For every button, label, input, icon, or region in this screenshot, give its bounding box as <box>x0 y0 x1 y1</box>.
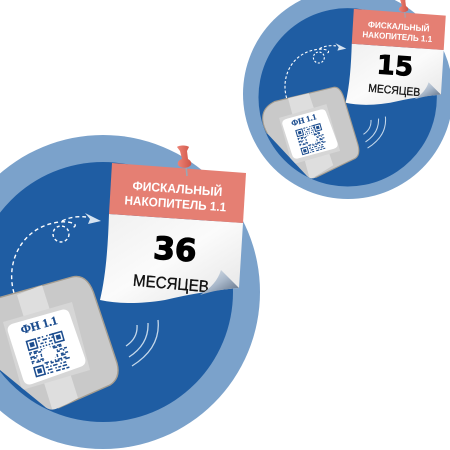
large outer ring <box>0 135 260 449</box>
small calendar card: МЕСЯЦЕВ <box>368 83 421 99</box>
small calendar card <box>346 9 446 105</box>
label text: ФН 1.1 <box>19 313 59 337</box>
small calendar card: НАКОПИТЕЛЬ 1.1 <box>362 29 433 44</box>
card title <box>124 177 228 214</box>
signal waves <box>126 320 158 366</box>
QR finder squares <box>26 331 72 377</box>
fiscal device <box>0 276 118 412</box>
small QR code <box>295 124 327 155</box>
months number: 36 <box>152 231 198 269</box>
small dashed flight path with arrow <box>285 43 346 98</box>
device strip <box>17 285 78 412</box>
dashed flight path with arrow <box>12 213 101 293</box>
small signal waves <box>363 117 386 148</box>
small badge: 15 months <box>258 0 446 186</box>
large badge: 36 months <box>0 135 260 449</box>
small calendar card: 15 <box>376 50 414 83</box>
small push pin <box>398 0 408 18</box>
months label: МЕСЯЦЕВ <box>132 272 210 296</box>
page curl <box>200 270 239 295</box>
calendar card <box>100 163 246 303</box>
small fiscal device <box>263 87 359 180</box>
QR code <box>26 331 72 377</box>
small calendar card: ФИСКАЛЬНЫЙ <box>368 18 430 34</box>
small device strip <box>288 93 333 180</box>
small label text: ФН 1.1 <box>290 112 317 128</box>
card paper <box>100 214 243 303</box>
card header <box>109 163 246 223</box>
small outer ring <box>243 0 450 199</box>
card title: НАКОПИТЕЛЬ 1.1 <box>124 193 227 214</box>
small device body <box>263 87 359 178</box>
card title: ФИСКАЛЬНЫЙ <box>132 178 223 199</box>
push pin <box>177 146 191 176</box>
small label backing <box>279 104 340 165</box>
large inner disc <box>0 162 233 422</box>
white label <box>8 310 85 384</box>
small white label <box>282 109 338 159</box>
device body <box>0 276 118 410</box>
small inner disc <box>258 8 437 186</box>
label backing <box>3 302 90 390</box>
